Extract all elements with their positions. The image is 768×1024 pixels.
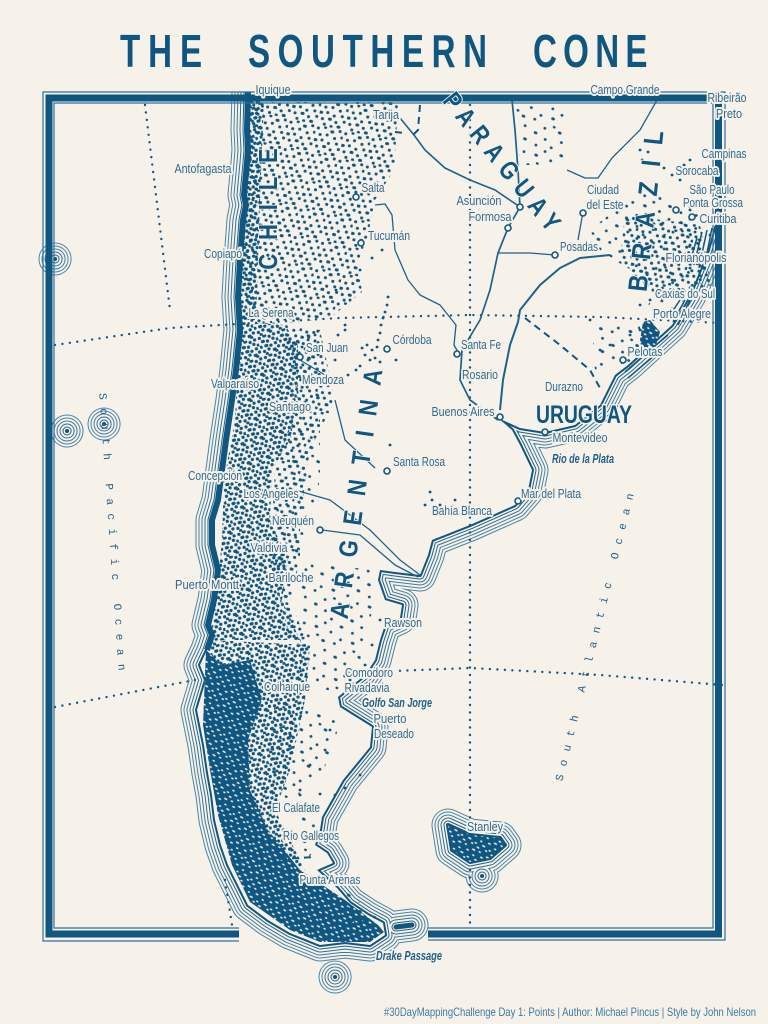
- title: SOUTHERN: [248, 27, 487, 77]
- dots: north Chile and northwest Argentina: [243, 102, 398, 325]
- water body labels: Drake Passage: [376, 949, 442, 963]
- dots: Isla de los Estados: [396, 925, 412, 927]
- city labels: Puerto Montt: [175, 578, 239, 592]
- dots: central Chile: [210, 322, 300, 640]
- river: Uruguay: [500, 255, 610, 410]
- city labels: Durazno: [545, 380, 583, 394]
- city labels: Campinas: [702, 147, 746, 161]
- city labels: [174, 83, 747, 887]
- city labels: Punta Arenas: [300, 873, 360, 887]
- city labels: Salta: [362, 181, 385, 195]
- city labels: Formosa: [468, 210, 512, 224]
- city labels: Los Angeles: [244, 487, 298, 501]
- city labels: del Este: [586, 198, 624, 212]
- city labels: Ponta Grossa: [683, 196, 743, 210]
- city labels: Bahía Blanca: [432, 504, 492, 518]
- water body labels: Golfo San Jorge: [362, 696, 432, 710]
- city labels: Buenos Aires: [432, 405, 494, 419]
- dashed borders: [280, 105, 600, 859]
- river: Paraguay and Parana: [460, 100, 520, 420]
- river: Colorado and Negro: [295, 360, 420, 577]
- city labels: Antofagasta: [174, 162, 232, 176]
- city labels: Preto: [716, 107, 742, 121]
- city labels: Sorocaba: [676, 164, 719, 178]
- dots: Andes mid band: [270, 325, 335, 650]
- city markers: [297, 115, 695, 533]
- city labels: Concepción: [188, 469, 242, 483]
- dark west coast band: [207, 92, 248, 650]
- city labels: Coihaique: [264, 680, 310, 694]
- settlement point dots: [203, 100, 712, 942]
- city labels: La Serena: [248, 306, 294, 320]
- city labels: Santa Fe: [461, 338, 501, 352]
- city labels: Santa Rosa: [393, 455, 445, 469]
- map frame: [43, 92, 725, 941]
- dots: hand placed: [290, 150, 710, 810]
- city labels: Iquique: [256, 83, 291, 97]
- dots: sparse interior regions: [265, 105, 710, 925]
- country labels: CHILE: [254, 148, 283, 270]
- city labels: Ciudad: [587, 183, 619, 197]
- city labels: Puerto: [374, 712, 407, 726]
- city labels: El Calafate: [272, 801, 320, 815]
- Brazilian coast hatching: [625, 228, 712, 378]
- city labels: Pelotas: [628, 345, 662, 359]
- city labels: Copiapó: [204, 247, 242, 261]
- dots: Patagonian archipelago: [203, 650, 384, 942]
- Lagoa dos Patos blob: [640, 320, 660, 352]
- city labels: Campo Grande: [590, 83, 660, 97]
- river: Pilcomayo: [400, 118, 520, 207]
- city labels: Caxias do Sul: [655, 287, 715, 301]
- city labels: Córdoba: [392, 333, 432, 347]
- city labels: Valparaíso: [211, 377, 259, 391]
- city labels: Stanley: [467, 820, 504, 834]
- city labels: Río Gallegos: [283, 829, 339, 843]
- city labels: Posadas: [560, 240, 598, 254]
- city labels: Deseado: [374, 727, 414, 741]
- country labels: URUGUAY: [536, 401, 632, 429]
- country labels: ARGENTINA: [325, 367, 389, 620]
- land mass: [197, 92, 716, 945]
- coastal contour lines: [55, 92, 714, 977]
- title: CONE: [533, 27, 647, 77]
- city labels: Ribeirão: [708, 91, 747, 105]
- dots: northern coast band: [240, 100, 264, 320]
- dots: southern Brazil cluster: [620, 215, 712, 300]
- title: [120, 27, 647, 77]
- city labels: Comodoro: [345, 666, 393, 680]
- title: THE: [120, 27, 202, 77]
- city labels: Rawson: [384, 616, 422, 630]
- city labels: Valdivia: [250, 541, 288, 555]
- city labels: Rivadavia: [344, 681, 390, 695]
- city labels: São Paulo: [690, 183, 735, 197]
- city labels: Bariloche: [268, 571, 314, 585]
- ocean labels: [95, 393, 638, 783]
- city labels: Florianópolis: [666, 251, 726, 265]
- city labels: Tarija: [373, 108, 399, 122]
- water body labels: [362, 452, 614, 963]
- city labels: Montevideo: [552, 431, 608, 445]
- dots: Falkland Islands: [448, 825, 505, 862]
- city labels: Tucumán: [368, 229, 410, 243]
- rivers: [295, 100, 657, 577]
- ocean labels: South Pacific Ocean: [95, 393, 127, 671]
- country labels: PARAGUAY: [437, 87, 567, 237]
- country labels: [254, 87, 670, 620]
- city labels: Mar del Plata: [521, 487, 581, 501]
- city labels: Porto Alegre: [653, 307, 711, 321]
- city labels: Rosario: [462, 368, 498, 382]
- river: Salado: [375, 204, 458, 352]
- water body labels: Rio de la Plata: [552, 452, 614, 466]
- river: upper Parana: [498, 100, 657, 255]
- city labels: Mendoza: [302, 373, 344, 387]
- graticule dotted lines: [55, 105, 722, 930]
- city labels: Curitiba: [700, 212, 737, 226]
- city labels: Neuquén: [272, 514, 314, 528]
- city labels: Asunción: [456, 194, 502, 208]
- city labels: Santiago: [269, 400, 311, 414]
- ocean labels: South Atlantic Ocean: [554, 492, 638, 783]
- city labels: San Juan: [306, 341, 348, 355]
- dots: southern Chile: [205, 640, 310, 870]
- country labels: BRAZIL: [623, 129, 670, 293]
